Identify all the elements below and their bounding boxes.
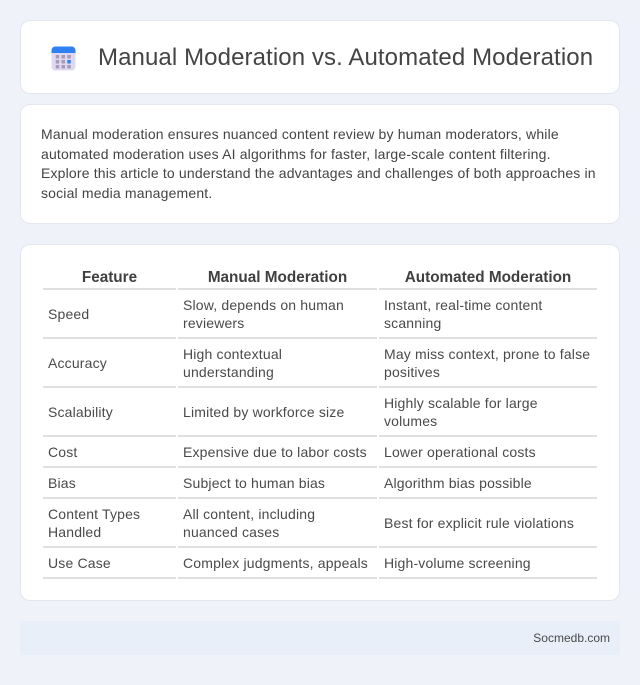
row: Scalability: Limited by workforce size — [183, 404, 344, 420]
row: Accuracy: Accuracy — [48, 355, 107, 371]
panel: introduction — [20, 104, 620, 224]
row: Content Types Handled: Handled — [48, 524, 101, 540]
table header: Automated Moderation — [405, 269, 571, 286]
row: Bias: Subject to human bias — [183, 475, 325, 491]
row: Scalability: Highly scalable for large — [384, 395, 538, 411]
row: Bias: Bias — [48, 475, 76, 491]
table header: Feature — [82, 269, 137, 286]
row: Speed: Instant, real-time content — [384, 297, 542, 313]
row: Cost: Expensive due to labor costs — [183, 444, 367, 460]
row: Accuracy: High contextual — [183, 346, 282, 362]
intro text: Manual moderation ensures nuanced content review by human moderators, while — [41, 126, 559, 142]
row: Use Case: Use Case — [48, 555, 111, 571]
row: Speed: Speed — [48, 306, 89, 322]
intro text: social media management. — [41, 184, 212, 200]
intro text — [41, 126, 596, 201]
footer bar — [20, 621, 620, 655]
row: Bias: Algorithm bias possible — [384, 475, 532, 491]
row: Accuracy: May miss context, prone to false — [384, 346, 590, 362]
table header — [82, 269, 571, 286]
table header: Manual Moderation — [208, 269, 347, 286]
intro text: Explore this article to understand the advantages and challenges of both approaches in — [41, 165, 596, 181]
row: Speed: Slow, depends on human — [183, 297, 344, 313]
row: Use Case: Complex judgments, appeals — [183, 555, 368, 571]
row: Content Types Handled: All content, including — [183, 506, 315, 522]
row: Scalability — [48, 395, 538, 429]
row: Content Types Handled — [48, 506, 574, 540]
row: Accuracy — [48, 346, 590, 380]
row: Speed: reviewers — [183, 315, 244, 331]
row: Content Types Handled: Content Types — [48, 506, 140, 522]
row: Content Types Handled: Best for explicit rule violations — [384, 515, 574, 531]
footer text: Socmedb.com — [533, 631, 610, 645]
panel: title card — [20, 20, 620, 94]
row: Scalability: volumes — [384, 413, 437, 429]
icon: calendar — [52, 46, 76, 70]
row: Scalability: Scalability — [48, 404, 113, 420]
row: Cost — [48, 444, 536, 460]
intro text: automated moderation uses AI algorithms for faster, large-scale content filtering. — [41, 146, 551, 162]
row: Speed: scanning — [384, 315, 441, 331]
row: Use Case: High-volume screening — [384, 555, 531, 571]
row: Use Case — [48, 555, 531, 571]
row: Cost: Cost — [48, 444, 77, 460]
row: Accuracy: positives — [384, 364, 440, 380]
title: Manual Moderation vs. Automated Moderation — [98, 44, 593, 71]
row: Cost: Lower operational costs — [384, 444, 536, 460]
row: Accuracy: understanding — [183, 364, 274, 380]
row: Bias — [48, 475, 532, 491]
panel: comparison table — [20, 244, 620, 601]
row: Speed — [48, 297, 542, 331]
row: Content Types Handled: nuanced cases — [183, 524, 279, 540]
